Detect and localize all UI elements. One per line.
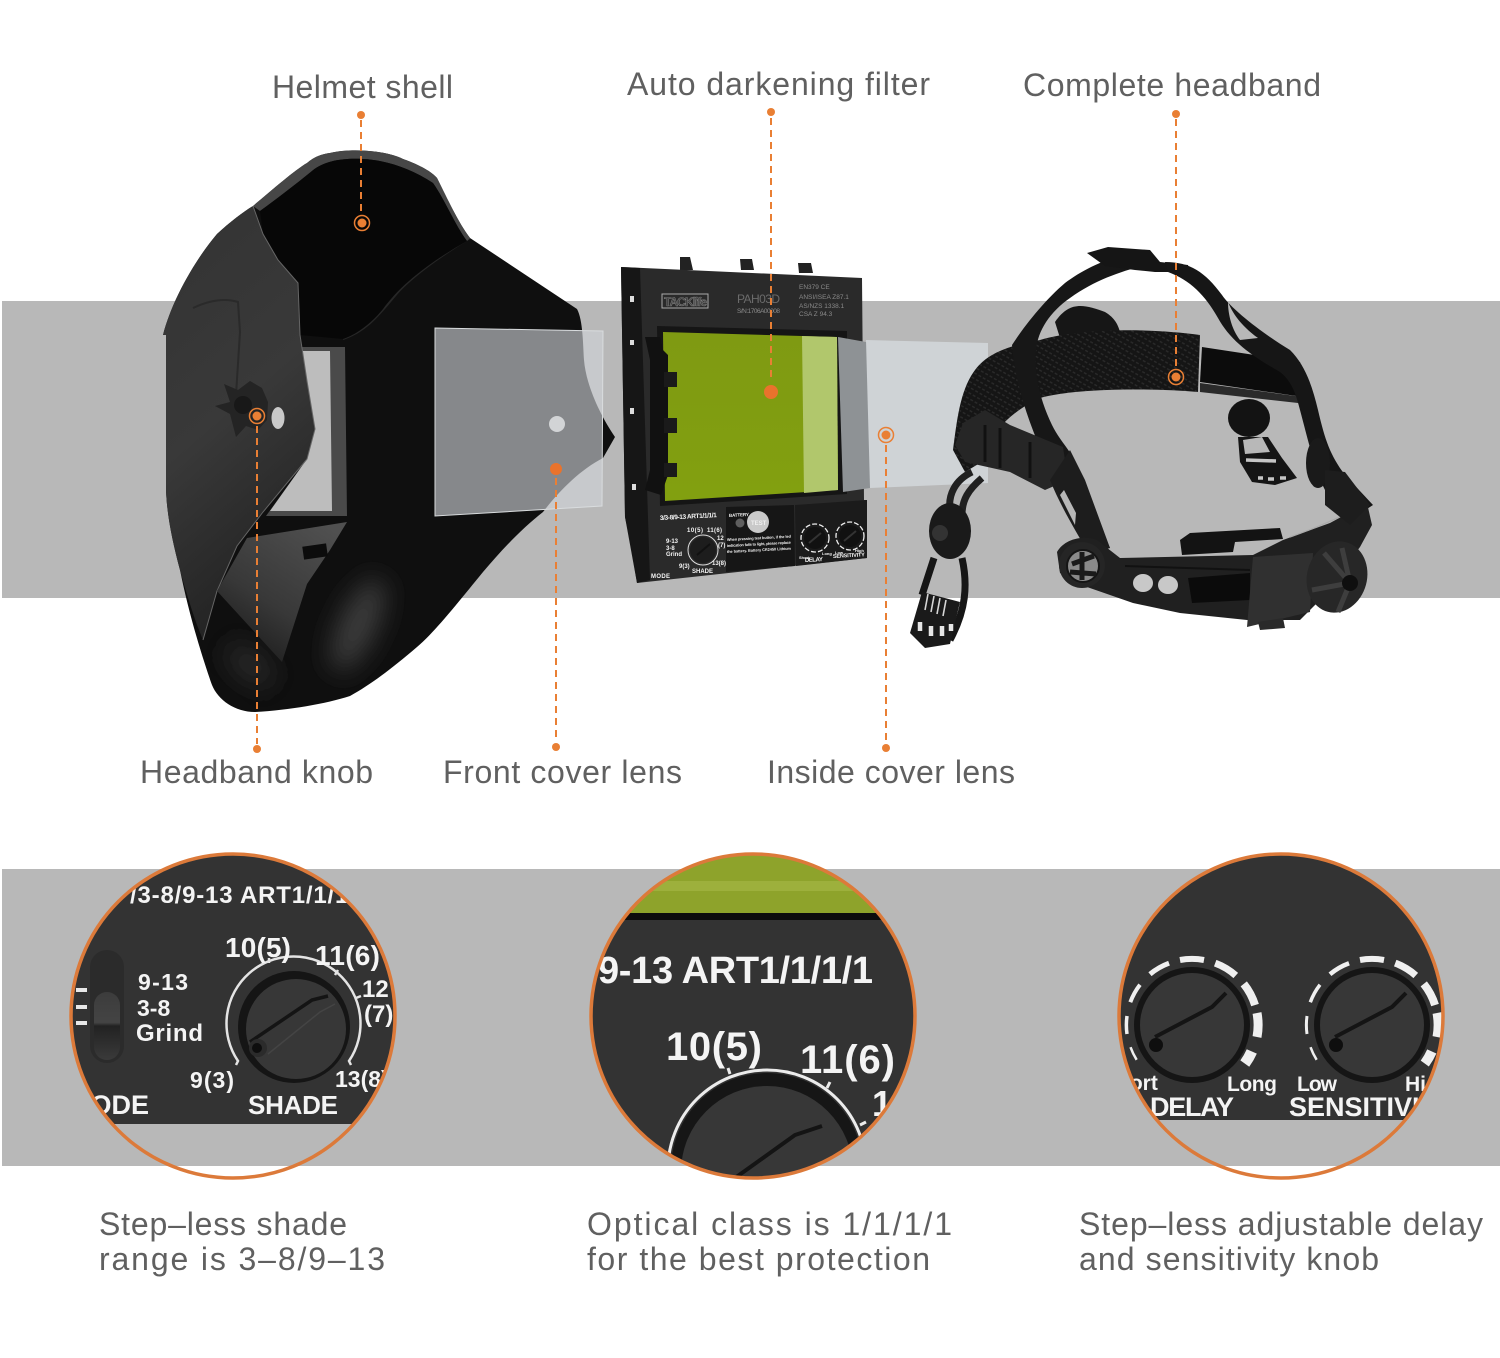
caption: shade range: Step–less shade (99, 1206, 347, 1242)
panel text (1134, 1076, 1424, 1116)
panel labels: 3/3-8/9-13 ART1/1/1/1 (660, 512, 717, 522)
right side block (1325, 470, 1370, 525)
label: Inside cover lens (767, 754, 1015, 790)
panel text: SHADE (248, 1090, 338, 1120)
panel text: 10(5) (225, 932, 291, 963)
ratchet slot (1188, 573, 1250, 603)
adjust knob hub (1342, 575, 1358, 591)
lens plate (866, 340, 988, 488)
arm slot (1060, 490, 1076, 525)
panel labels: 9(3) (679, 564, 690, 570)
leader line (1175, 119, 1177, 368)
side knob (929, 503, 971, 559)
rear black strap (1200, 347, 1310, 398)
instruction text: When pressing test button, if the led (727, 535, 792, 542)
panel labels: Short (799, 555, 810, 560)
shade knob (688, 535, 718, 565)
panel text: (7) (364, 1001, 393, 1028)
standards text (799, 284, 849, 318)
caption: optical class: Optical class is 1/1/1/1 (587, 1206, 952, 1242)
knob hub (234, 396, 252, 414)
shade knob (226, 956, 360, 1083)
shade knob (668, 1068, 862, 1176)
panel text: SENSITIVITY (1289, 1092, 1454, 1122)
panel text: 12 (362, 976, 389, 1003)
target (550, 463, 562, 475)
leader line (555, 478, 557, 742)
caption: shade range (99, 1206, 385, 1277)
panel text: 11(6) (315, 940, 380, 971)
lower grey band (2, 869, 1500, 1166)
panel text: 10(5) (666, 1025, 762, 1069)
callout: complete headband (1023, 67, 1321, 384)
panel labels: DELAY (805, 557, 823, 564)
label: Helmet shell (272, 69, 453, 105)
top dot (1172, 110, 1180, 118)
panel text: 12 (872, 1083, 912, 1124)
panel text: Long (1227, 1073, 1277, 1096)
pivot wheel (1059, 542, 1105, 588)
caption: shade range: range is 3–8/9–13 (99, 1241, 385, 1277)
ratchet foot (1258, 618, 1285, 630)
clasp ridges (985, 425, 1030, 478)
helmet shell illustration (163, 150, 615, 712)
instruction text (727, 535, 792, 554)
panel labels: SHADE (692, 569, 713, 575)
light green section (802, 336, 838, 493)
hinge clips (645, 337, 668, 495)
callout: auto darkening filter (627, 66, 930, 399)
green screen strip (630, 856, 876, 913)
caption: delay and sensitivity: Step–less adjustable delay (1079, 1206, 1483, 1242)
circle contents (72, 856, 394, 1124)
auto darkening filter (621, 257, 988, 583)
brand logo: TACKlife (664, 295, 707, 309)
panel labels: 13(8) (712, 561, 726, 567)
panel text (600, 956, 893, 1116)
rear pad (1238, 437, 1297, 485)
top dot (767, 108, 775, 116)
callout: helmet shell (272, 69, 453, 230)
bottom dot (552, 743, 560, 751)
panel labels: 10(5) (687, 528, 703, 534)
callout: front cover lens (443, 463, 682, 790)
orange ring (71, 854, 395, 1178)
target (354, 216, 370, 230)
lower band (1057, 503, 1372, 620)
knob ticks (728, 1068, 866, 1125)
band stripe (1125, 566, 1250, 570)
delay knob (1126, 959, 1258, 1083)
standards text: ANSI/ISEA Z87.1 (799, 294, 849, 301)
panel text: Low (1297, 1073, 1338, 1096)
dark panel (1120, 856, 1442, 1120)
circle contents (592, 856, 914, 1176)
front crown strap (1012, 254, 1145, 552)
bottom dot (253, 745, 261, 753)
panel labels: Low (835, 550, 844, 555)
panel text: /3-8/9-13 ART1/1/1/1 (130, 882, 370, 909)
pivot wheel centre (1067, 550, 1099, 582)
panel labels: 12 (717, 536, 724, 542)
panel text: 13(8) (335, 1066, 389, 1092)
circle contents (1120, 856, 1442, 1120)
green screen highlight (653, 881, 853, 891)
dark panel (592, 920, 914, 1152)
panel text: 11(6) (800, 1038, 895, 1082)
sweatband fabric (953, 330, 1200, 472)
sensitivity knob (1306, 959, 1438, 1083)
caption: optical class: for the best protection (587, 1241, 930, 1277)
top tabs (680, 257, 813, 273)
callout: inside cover lens (767, 428, 1015, 790)
instruction text: indication fails to light, please replace (727, 541, 791, 548)
lower left pad arms (922, 558, 965, 640)
standards text: AS/NZS 1338.1 (799, 303, 845, 310)
label: Front cover lens (443, 754, 682, 790)
control panels (726, 505, 795, 572)
upper slide piece (1180, 528, 1283, 555)
leader line (885, 445, 887, 742)
rear strap lower rail (1200, 383, 1316, 405)
instruction text: the battery. Battery CR2450 Lithium (727, 547, 792, 554)
band holes second (1158, 576, 1178, 594)
standards text: CSA Z 94.3 (799, 311, 833, 318)
test button: TEST (751, 521, 767, 527)
lens shadow part (838, 337, 870, 492)
panel text: Short (1103, 1072, 1158, 1095)
model text: PAH03D (737, 292, 780, 306)
ratchet box (1247, 553, 1313, 627)
panel text: DELAY (1150, 1092, 1234, 1122)
top dot (357, 111, 365, 119)
inside cover lens (838, 337, 988, 492)
standards text: EN379 CE (799, 284, 830, 291)
caption: optical class (587, 1206, 952, 1277)
battery light (736, 518, 744, 528)
helmet top brim (253, 150, 470, 241)
helmet silhouette (163, 150, 615, 712)
panel labels: Long (822, 551, 832, 556)
orange ring (1119, 854, 1443, 1178)
panel labels: High (855, 548, 864, 553)
knob star (215, 381, 268, 437)
adjust knob (1299, 534, 1375, 620)
right crown strap (1165, 262, 1373, 520)
detail circle: shade range (60, 850, 410, 1178)
panel labels: 11(6) (707, 528, 722, 534)
panel labels: MODE (651, 574, 670, 580)
side panel (163, 206, 315, 640)
rear pad opening (1243, 437, 1270, 454)
lower flap (217, 522, 347, 662)
panel labels (651, 512, 865, 580)
side adjuster arms (950, 472, 982, 515)
rear inner arc (1055, 306, 1120, 338)
flap notch (302, 543, 328, 560)
side clasp block (955, 410, 1068, 490)
side knob screw (932, 525, 948, 541)
panel text: 9(3) (190, 1067, 234, 1093)
target (878, 428, 894, 442)
delay knob (801, 524, 829, 552)
edge dots (630, 296, 636, 490)
leader line (360, 120, 362, 216)
dark panel (72, 856, 394, 1124)
caption: delay and sensitivity (1079, 1206, 1483, 1277)
rear disc (1228, 399, 1270, 437)
serial text: S/N:1706A00008 (737, 308, 780, 315)
bottom dot (882, 744, 890, 752)
panel text: High (1405, 1073, 1452, 1096)
panel text: 9-13 ART1/1/1/1 (598, 950, 873, 992)
leader line (770, 118, 772, 382)
label: Auto darkening filter (627, 66, 930, 102)
battery label: BATTERY (729, 512, 749, 518)
left ridged edge (621, 267, 650, 583)
lower interior highlights (218, 238, 470, 695)
lower left pad (910, 592, 960, 648)
window frame (266, 347, 347, 516)
mode ticks (76, 990, 87, 1023)
side panel edge (203, 206, 315, 640)
target (1168, 370, 1184, 384)
target (250, 408, 264, 424)
lens plate (435, 328, 603, 516)
filter body (621, 267, 867, 583)
green screen (663, 332, 838, 501)
upper grey band (2, 301, 1500, 598)
panel labels: 9-13 (666, 539, 679, 545)
panel text: 9-13 (138, 969, 188, 995)
pivot cross (1070, 552, 1096, 580)
band holes (1133, 574, 1153, 592)
panel text: 3-8 (137, 995, 170, 1021)
black strip (625, 913, 882, 920)
callout: headband knob (140, 408, 373, 790)
side panel recess (193, 300, 240, 395)
panel labels: 3-8 (666, 546, 675, 552)
panel labels: Grind (666, 552, 682, 558)
band inner curve (1290, 505, 1362, 537)
sensitivity knob (836, 522, 864, 550)
complete headband illustration (910, 247, 1375, 648)
label: Complete headband (1023, 67, 1321, 103)
hinge tabs (664, 372, 677, 477)
green screen frame (657, 326, 847, 506)
right control panel (795, 500, 867, 566)
lower left pad holes (920, 622, 951, 636)
right joint (1306, 438, 1330, 488)
panel labels: (7) (718, 543, 725, 549)
crown buckle (1087, 247, 1190, 272)
detail circle: delay and sensitivity (1103, 850, 1460, 1178)
window glass (270, 351, 332, 511)
detail circle: optical class (589, 852, 917, 1180)
right crown opening (1228, 302, 1258, 340)
knob ticks (269, 958, 361, 998)
panel labels: SENSITIVITY (833, 552, 865, 560)
upper interior (260, 159, 467, 339)
lower left pad slots (925, 594, 946, 616)
label: Headband knob (140, 754, 373, 790)
caption: delay and sensitivity: and sensitivity knob (1079, 1241, 1379, 1277)
panel text (94, 886, 392, 1114)
lower front arm (1050, 450, 1110, 552)
leader line (256, 426, 258, 744)
panel text: MODE (68, 1090, 149, 1120)
orange ring (591, 854, 915, 1178)
test button (747, 511, 769, 533)
adjust knob spokes (1312, 548, 1350, 612)
target (764, 385, 778, 399)
rear pad holes (1246, 460, 1286, 479)
front cover lens (435, 328, 603, 516)
lens hole (549, 416, 565, 432)
mode slider (90, 950, 124, 1063)
side hole (272, 407, 284, 429)
panel text: Grind (136, 1020, 203, 1047)
